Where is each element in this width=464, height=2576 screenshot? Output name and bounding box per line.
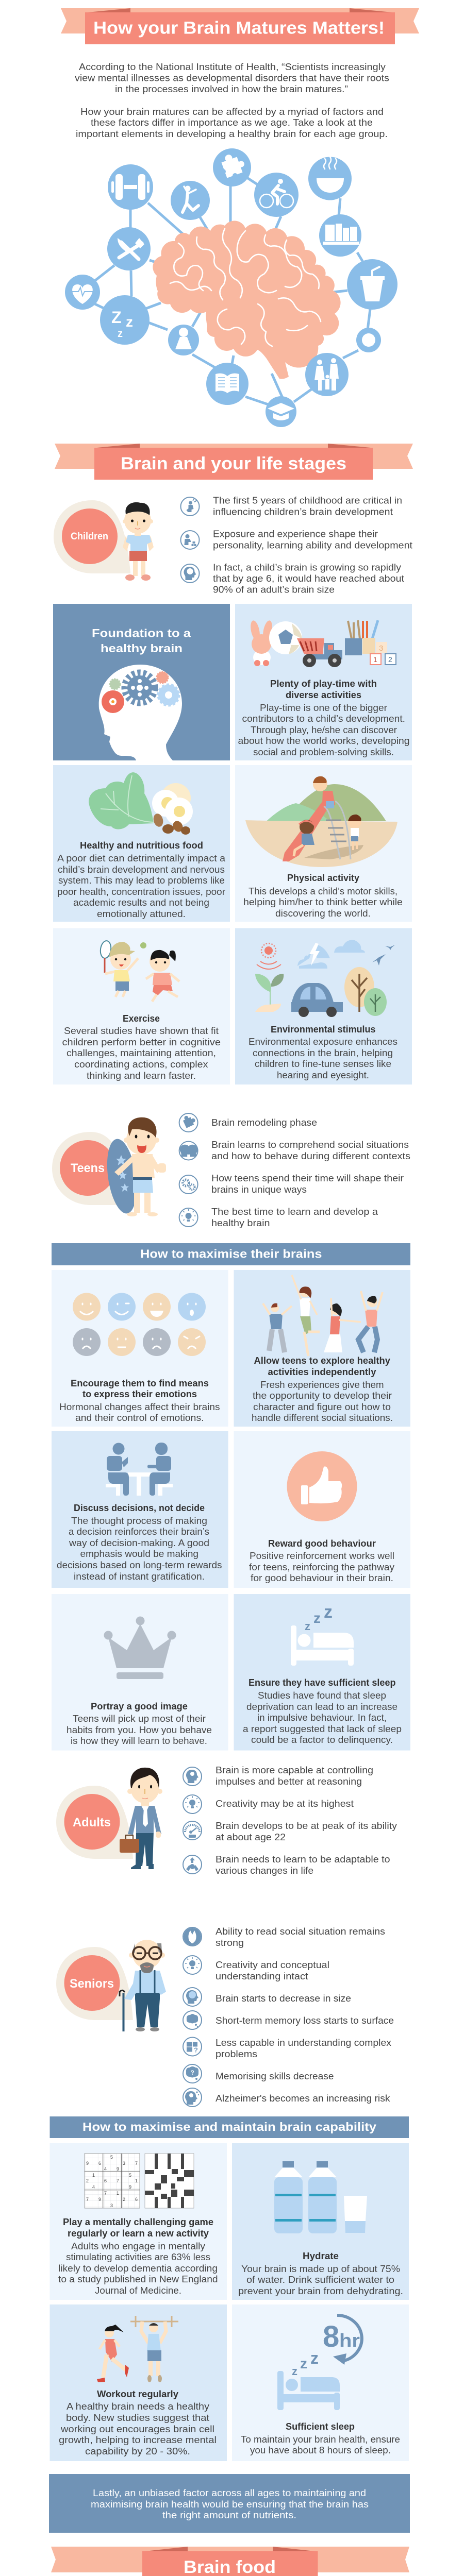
icon: head with brain bbox=[183, 1988, 202, 2006]
sudoku grid: 4 bbox=[104, 2166, 107, 2172]
text: Environmental stimulus bbox=[271, 1024, 375, 1035]
panel: foundation to a healthy brain bbox=[53, 604, 230, 760]
text: likely to develop dementia according bbox=[58, 2263, 218, 2274]
text: regularly or learn a new activity bbox=[68, 2228, 209, 2239]
text: Environmental exposure enhances bbox=[248, 1037, 397, 1047]
text bbox=[59, 2389, 217, 2456]
callout: nutrients: maximising brain health would be ensuring that the brain has bbox=[91, 2499, 369, 2510]
jumping teens bbox=[263, 1275, 383, 1356]
text: challenges, maintaining attention, bbox=[67, 1048, 216, 1058]
intro text: view mental illnesses as developmental disorders that have their roots bbox=[75, 73, 389, 83]
life stage: adults bbox=[56, 1765, 397, 1876]
children facts: personality, learning ability and development bbox=[213, 540, 412, 550]
adults facts: Brain develops to be at peak of its ability bbox=[216, 1821, 397, 1831]
intro text: in the processes involved in how the brain matures.” bbox=[115, 84, 348, 94]
adults badge: Adults bbox=[73, 1816, 111, 1829]
text: Studies have found that sleep bbox=[258, 1690, 386, 1701]
seniors facts: strong bbox=[216, 1938, 244, 1948]
sudoku grid: 6 bbox=[98, 2161, 101, 2166]
food illustration bbox=[89, 772, 193, 835]
text: Your brain is made up of about 75% bbox=[241, 2264, 400, 2274]
text: diverse activities bbox=[286, 690, 361, 700]
children facts: that by age 6, it would have reached about bbox=[213, 573, 404, 584]
adults facts: impulses and better at reasoning bbox=[216, 1776, 362, 1787]
text: hearing and eyesight. bbox=[277, 1070, 369, 1080]
text: capability by 20 - 30%. bbox=[85, 2446, 190, 2456]
text: for teens, reinforcing the pathway bbox=[249, 1562, 394, 1572]
text bbox=[249, 1538, 394, 1583]
panel: mentally challenging game bbox=[49, 2143, 227, 2300]
callout: nutrients bbox=[49, 2474, 410, 2533]
intro text: important elements in developing a healthy brain for each age group. bbox=[76, 129, 388, 139]
heading bar: how to maximise and maintain brain capability bbox=[49, 2116, 409, 2138]
text: for good behaviour in their brain. bbox=[251, 1573, 393, 1583]
sudoku grid: 7 bbox=[135, 2161, 138, 2166]
teens facts: The best time to learn and develop a bbox=[211, 1207, 378, 1217]
panel: healthy and nutritious food bbox=[53, 765, 230, 922]
text: Reward good behaviour bbox=[268, 1538, 376, 1549]
text: in impulsive behaviour. In fact, bbox=[257, 1713, 387, 1723]
8 hours of sleep icon bbox=[277, 2315, 362, 2410]
sudoku grid: 1 bbox=[92, 2173, 95, 2178]
teens facts: How teens spend their time will shape their bbox=[211, 1173, 404, 1183]
text: Hormonal changes affect their brains bbox=[59, 1402, 220, 1412]
8 hours of sleep icon: z bbox=[310, 2349, 319, 2367]
title banner: How your Brain Matures Matters! bbox=[93, 19, 385, 38]
children facts bbox=[213, 496, 412, 595]
text: poor health, concentration issues, poor bbox=[57, 887, 225, 897]
text bbox=[62, 1013, 221, 1081]
brain network illustration bbox=[65, 148, 397, 427]
text: character and figure out how to bbox=[253, 1402, 391, 1412]
text: Physical activity bbox=[287, 873, 359, 883]
icon: puzzle piece bbox=[213, 148, 251, 187]
text: Hydrate bbox=[303, 2251, 339, 2261]
text: Portray a good image bbox=[91, 1701, 188, 1711]
man with briefcase bbox=[120, 1768, 162, 1869]
heading bar: how to maximise their brains: How to maximise their brains bbox=[140, 1247, 322, 1261]
icon: adapting arrows head bbox=[183, 1855, 202, 1874]
icon: open book bbox=[206, 363, 248, 405]
toys illustration: 2 bbox=[388, 655, 392, 664]
life stage: children bbox=[54, 496, 412, 595]
icon: cloud with question mark bbox=[183, 2064, 202, 2083]
text: emphasis would be making bbox=[80, 1549, 198, 1559]
text: prevent your brain from dehydrating. bbox=[238, 2286, 403, 2296]
text: children perform better in cognitive bbox=[62, 1037, 221, 1047]
sudoku grid: 5 bbox=[129, 2173, 131, 2178]
sudoku grid bbox=[85, 2154, 140, 2208]
icon: puzzle with question mark bbox=[183, 2037, 202, 2056]
icon: light bulb bbox=[183, 1956, 202, 1974]
thumbs-up icon bbox=[287, 1451, 357, 1521]
seniors badge bbox=[56, 1947, 133, 2020]
panel: workout regularly bbox=[49, 2304, 227, 2461]
teens badge: Teens bbox=[71, 1161, 105, 1175]
panel: sufficient sleep bbox=[232, 2304, 409, 2461]
two people at a table icon bbox=[106, 1443, 173, 1496]
emotion faces bbox=[73, 1293, 206, 1356]
sudoku grid: 9 bbox=[98, 2197, 101, 2202]
text: emotionally attuned. bbox=[97, 909, 186, 919]
icon: person bust bbox=[168, 325, 199, 355]
bed with zzz icon: z bbox=[305, 1620, 310, 1633]
icon: gears bbox=[179, 1175, 198, 1194]
icon: cyclist bbox=[254, 173, 299, 217]
icon: head with 90 percent bbox=[180, 564, 199, 583]
section banner: brain and your life stages: Brain and your life stages bbox=[121, 454, 346, 473]
children facts: 90% of an adult’s brain size bbox=[213, 585, 335, 595]
text: and their control of emotions. bbox=[75, 1413, 204, 1423]
heading bar: how to maximise and maintain brain capability: How to maximise and maintain brain capability bbox=[82, 2120, 376, 2133]
life stage: teens bbox=[52, 1113, 410, 1228]
adults facts bbox=[216, 1765, 397, 1876]
children facts: influencing children’s brain development bbox=[213, 507, 393, 517]
icon: child with blocks bbox=[180, 531, 199, 549]
text: social and problem-solving skills. bbox=[253, 747, 394, 757]
text: a decision reinforces their brain’s bbox=[69, 1527, 209, 1537]
text: Play a mentally challenging game bbox=[63, 2217, 213, 2227]
icon: sleep zzz: z bbox=[118, 328, 123, 340]
icon: puzzle with question mark: ? bbox=[194, 2046, 198, 2054]
children facts: The first 5 years of childhood are critical in bbox=[213, 496, 402, 506]
intro text: these factors differ in importance as we age. Take a look at the bbox=[91, 117, 373, 128]
8 hours of sleep icon: z bbox=[292, 2365, 297, 2378]
sudoku grid: 4 bbox=[92, 2184, 95, 2190]
text bbox=[243, 1677, 402, 1745]
icon: knife and fork bbox=[107, 227, 151, 270]
text: way of decision-making. A good bbox=[69, 1538, 209, 1548]
children facts: In fact, a child’s brain is growing so rapidly bbox=[213, 563, 401, 573]
text: thinking and learn faster. bbox=[87, 1071, 196, 1081]
icon: cup with straw bbox=[347, 259, 397, 310]
kids playing illustration bbox=[100, 940, 179, 1002]
text: the opportunity to develop their bbox=[253, 1391, 392, 1401]
panel: sufficient sleep for teens bbox=[234, 1594, 410, 1751]
text: system. This may lead to problems like bbox=[58, 875, 225, 886]
seniors badge: Seniors bbox=[70, 1977, 114, 1991]
teens facts: brains in unique ways bbox=[211, 1184, 307, 1195]
text bbox=[248, 1024, 397, 1080]
icon: two faces bbox=[179, 1142, 198, 1160]
seniors facts: Alzheimer's becomes an increasing risk bbox=[216, 2093, 391, 2104]
teens facts: Brain remodeling phase bbox=[211, 1117, 317, 1128]
text: Positive reinforcement works well bbox=[250, 1551, 394, 1561]
boy figure bbox=[123, 502, 154, 581]
panel: express emotions bbox=[52, 1270, 228, 1427]
text: stimulating activities are 63% less bbox=[66, 2252, 210, 2262]
text: of water. Drink sufficient water to bbox=[246, 2275, 394, 2285]
icon: sleep zzz: Z bbox=[111, 308, 122, 327]
sudoku grid: 9 bbox=[129, 2184, 131, 2190]
children badge: Children bbox=[71, 531, 108, 542]
icon: head with sparks bbox=[183, 2088, 202, 2107]
text: is how they will learn to behave. bbox=[71, 1736, 207, 1746]
text: academic results and not being bbox=[73, 897, 209, 908]
text: Plenty of play-time with bbox=[270, 679, 377, 689]
text bbox=[243, 873, 403, 919]
8 hours of sleep icon: hr bbox=[339, 2330, 360, 2351]
heading: Foundation to a bbox=[92, 626, 191, 640]
children badge bbox=[54, 500, 130, 573]
text: habits from you. How you behave bbox=[67, 1725, 212, 1735]
icon: heart with pulse bbox=[65, 275, 100, 310]
text: To maintain your brain health, ensure bbox=[241, 2434, 400, 2445]
text bbox=[252, 1355, 393, 1423]
seniors facts: problems bbox=[216, 2049, 257, 2059]
panel: exercise bbox=[53, 928, 230, 1084]
intro text bbox=[75, 62, 389, 139]
seniors facts: Short-term memory loss starts to surface bbox=[216, 2015, 394, 2026]
icon: dumbbell bbox=[108, 164, 153, 210]
text: decisions based on long-term rewards bbox=[57, 1560, 222, 1570]
text: growth, helping to increase mental bbox=[59, 2435, 217, 2445]
icon: sleep zzz bbox=[100, 295, 150, 345]
icon: jumping person bbox=[171, 181, 210, 220]
text bbox=[67, 1701, 212, 1746]
sudoku grid: 3 bbox=[123, 2161, 125, 2166]
text: Exercise bbox=[123, 1013, 160, 1024]
adults facts: various changes in life bbox=[216, 1866, 313, 1876]
text: body. New studies suggest that bbox=[66, 2413, 209, 2423]
sudoku grid: 5 bbox=[110, 2155, 113, 2160]
teens facts: Brain learns to comprehend social situations bbox=[211, 1140, 409, 1150]
text: children to fine-tune senses like bbox=[255, 1059, 391, 1069]
children facts: Exposure and experience shape their bbox=[213, 529, 378, 539]
bed with zzz icon: z bbox=[324, 1602, 333, 1622]
sudoku grid: 2 bbox=[123, 2197, 125, 2202]
toys illustration bbox=[249, 620, 396, 667]
brain bbox=[153, 221, 341, 379]
text bbox=[57, 840, 226, 919]
text: about how the world works, developing bbox=[238, 736, 409, 746]
text: Sufficient sleep bbox=[286, 2421, 355, 2432]
callout: nutrients: Lastly, an unbiased factor across all ages to maintaining and bbox=[93, 2488, 366, 2498]
toys illustration: 3 bbox=[379, 644, 383, 653]
seniors facts: understanding intact bbox=[216, 1971, 308, 1981]
intro text: How your brain matures can be affected by a myriad of factors and bbox=[80, 107, 384, 117]
8 hours of sleep icon: 8 bbox=[323, 2320, 339, 2353]
text: Allow teens to explore healthy bbox=[254, 1355, 390, 1366]
sudoku grid: 1 bbox=[135, 2178, 138, 2183]
teens facts bbox=[211, 1117, 410, 1228]
adults badge bbox=[56, 1786, 133, 1859]
sudoku grid: 1 bbox=[117, 2191, 119, 2196]
panel: environmental stimulus bbox=[235, 928, 412, 1084]
adults facts: Brain needs to learn to be adaptable to bbox=[216, 1854, 390, 1865]
panel: portray a good image bbox=[52, 1594, 228, 1751]
text bbox=[238, 679, 409, 757]
title banner bbox=[61, 8, 419, 44]
text: instead of instant gratification. bbox=[74, 1571, 205, 1582]
text: helping him/her to think better while bbox=[243, 897, 403, 907]
teens facts: healthy brain bbox=[211, 1218, 270, 1228]
life stage: seniors bbox=[56, 1926, 394, 2107]
text: discovering the world. bbox=[275, 908, 371, 919]
text bbox=[57, 1503, 222, 1582]
section banner: brain food bbox=[51, 2547, 409, 2576]
text: Play-time is one of the bigger bbox=[260, 703, 387, 713]
seniors facts: Creativity and conceptual bbox=[216, 1960, 329, 1970]
text bbox=[241, 2421, 400, 2455]
adults facts: Creativity may be at its highest bbox=[216, 1799, 354, 1809]
text: A poor diet can detrimentally impact a bbox=[57, 853, 226, 863]
text: Ensure they have sufficient sleep bbox=[248, 1677, 396, 1688]
text: This develops a child’s motor skills, bbox=[248, 886, 397, 896]
sudoku grid: 7 bbox=[104, 2191, 107, 2196]
callout: nutrients: the right amount of nutrients. bbox=[162, 2510, 296, 2520]
text: a report suggested that lack of sleep bbox=[243, 1724, 402, 1734]
text: Encourage them to find means bbox=[71, 1378, 209, 1388]
seniors facts: Ability to read social situation remains bbox=[216, 1926, 385, 1937]
panel: hydrate bbox=[232, 2143, 409, 2300]
heading bbox=[92, 626, 191, 655]
environment illustration bbox=[255, 940, 395, 1017]
icon: family bbox=[305, 353, 349, 396]
seniors facts: Brain starts to decrease in size bbox=[216, 1993, 351, 2004]
bed with zzz icon bbox=[291, 1602, 354, 1666]
text: Journal of Medicine. bbox=[95, 2285, 181, 2296]
icon: thought cloud bbox=[183, 2011, 202, 2029]
adults facts: at about age 22 bbox=[216, 1832, 286, 1842]
icon: heart pin bbox=[356, 328, 381, 352]
text bbox=[238, 2251, 403, 2296]
seniors facts bbox=[216, 1926, 394, 2104]
heading: healthy brain bbox=[101, 642, 183, 655]
text: Through play, he/she can discover bbox=[251, 725, 397, 735]
text: Discuss decisions, not decide bbox=[74, 1503, 205, 1513]
text: contributors to a child’s development. bbox=[242, 714, 405, 724]
text: working out encourages brain cell bbox=[60, 2424, 214, 2434]
icon: hot bowl bbox=[308, 157, 352, 200]
icon: two faces bbox=[183, 1927, 202, 1946]
teens badge bbox=[52, 1132, 129, 1205]
text: Teens will pick up most of their bbox=[73, 1714, 206, 1724]
text: deprivation can lead to an increase bbox=[246, 1702, 397, 1712]
toys illustration: 1 bbox=[373, 655, 377, 664]
icon: puzzle bbox=[179, 1113, 198, 1132]
crossword grid bbox=[145, 2154, 194, 2208]
sudoku grid: 6 bbox=[135, 2197, 138, 2202]
sudoku grid: 9 bbox=[117, 2166, 119, 2172]
sudoku grid: 7 bbox=[86, 2197, 89, 2202]
text: to a study published in New England bbox=[58, 2274, 218, 2284]
playground illustration bbox=[245, 776, 397, 867]
panel: discuss decisions bbox=[52, 1431, 228, 1588]
teens facts: and how to behave during different contexts bbox=[211, 1151, 410, 1161]
icon: sleep zzz: z bbox=[126, 314, 133, 330]
icon: light bulb bbox=[183, 1795, 202, 1814]
text: connections in the brain, helping bbox=[253, 1048, 393, 1058]
adults facts: Brain is more capable at controlling bbox=[216, 1765, 373, 1775]
panel: physical activity bbox=[235, 765, 412, 922]
section banner: brain and your life stages bbox=[55, 444, 413, 480]
seniors facts: Memorising skills decrease bbox=[216, 2071, 334, 2081]
text: coordinating actions, complex bbox=[74, 1059, 208, 1070]
icon: light bulb bbox=[179, 1208, 198, 1227]
panel: reward good behaviour bbox=[234, 1431, 410, 1588]
8 hours of sleep icon: z bbox=[300, 2355, 307, 2371]
text: Healthy and nutritious food bbox=[80, 840, 203, 851]
old man with cane bbox=[120, 1940, 166, 2031]
text: you have about 8 hours of sleep. bbox=[250, 2445, 391, 2455]
intro text: According to the National Institute of Health, “Scientists increasingly bbox=[79, 62, 386, 72]
text: child’s brain development and nervous bbox=[58, 865, 225, 875]
text: Several studies have shown that fit bbox=[64, 1026, 219, 1036]
text: activities independently bbox=[268, 1367, 376, 1377]
teen with surfboard bbox=[103, 1117, 166, 1216]
text: Workout regularly bbox=[97, 2389, 178, 2399]
icon: gauge bbox=[183, 1821, 202, 1840]
workout illustration bbox=[97, 2316, 178, 2382]
crown icon bbox=[104, 1617, 176, 1679]
sudoku grid: 3 bbox=[110, 2203, 113, 2208]
sudoku grid: 7 bbox=[117, 2178, 119, 2183]
text: Adults who engage in mentally bbox=[71, 2241, 205, 2251]
text: could be a factor to delinquency. bbox=[251, 1735, 393, 1745]
icon: crawling child bbox=[180, 497, 199, 516]
water bottles and glass bbox=[274, 2161, 367, 2233]
sudoku grid: 2 bbox=[86, 2178, 89, 2183]
panel: explore healthy activities bbox=[234, 1270, 410, 1427]
sudoku grid: 9 bbox=[86, 2161, 89, 2166]
icon: head with gears bbox=[183, 1767, 202, 1786]
text: handle different social situations. bbox=[252, 1413, 393, 1423]
panel: plenty of play-time bbox=[235, 604, 412, 760]
head with gears bbox=[99, 665, 182, 760]
text: to express their emotions bbox=[82, 1389, 197, 1399]
sudoku grid: 6 bbox=[104, 2178, 107, 2183]
icon: graduation cap bbox=[266, 396, 296, 427]
bed with zzz icon: z bbox=[313, 1610, 321, 1626]
text: A healthy brain needs a healthy bbox=[67, 2401, 209, 2412]
text bbox=[59, 1378, 220, 1423]
text bbox=[58, 2217, 218, 2296]
heading bar: how to maximise their brains bbox=[52, 1243, 410, 1265]
icon: city bbox=[319, 214, 361, 257]
icon: cloud with question mark: ? bbox=[191, 2069, 194, 2076]
seniors facts: Less capable in understanding complex bbox=[216, 2038, 391, 2048]
text: The thought process of making bbox=[71, 1516, 207, 1526]
text: Fresh experiences give them bbox=[260, 1380, 384, 1390]
